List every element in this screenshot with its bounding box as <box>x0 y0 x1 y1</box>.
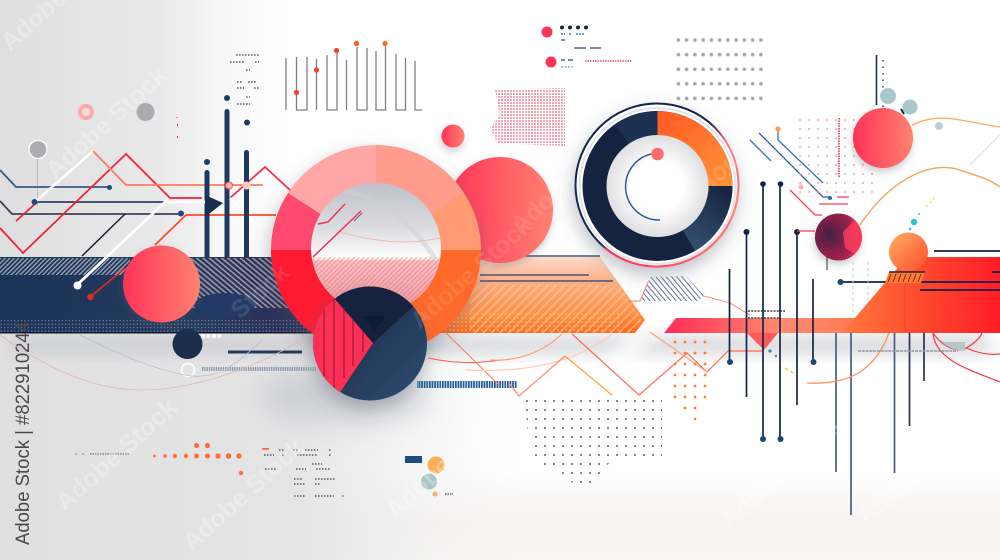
navy band <box>0 257 325 334</box>
orange curves right <box>807 118 1000 383</box>
zigzag lines lower <box>465 332 763 396</box>
line endpoints <box>32 185 184 216</box>
coral circle right <box>853 108 913 168</box>
lower right legend circles <box>405 456 453 496</box>
ring centre <box>311 183 441 303</box>
right diagonal accents <box>750 126 849 231</box>
maroon sphere <box>815 213 862 261</box>
small marker circles <box>29 103 178 206</box>
dark pie circle <box>300 282 440 400</box>
watermark text: Adobe Stock <box>715 411 848 534</box>
under band details <box>0 329 517 390</box>
navy columns <box>204 95 250 260</box>
left white and red connectors <box>74 202 205 300</box>
donut orange segment <box>658 111 732 186</box>
gray dot grid <box>675 33 766 103</box>
top left micro marks <box>230 55 260 104</box>
watermark text: Adobe Stock <box>40 61 173 184</box>
top right accents <box>876 55 943 130</box>
hatched comb <box>885 272 925 283</box>
right horizontal navy lines <box>827 251 1000 312</box>
vertical stock label: Adobe Stock | #822910244 <box>13 322 34 545</box>
mesh triangle <box>628 276 785 318</box>
bottom dot grid <box>525 399 662 486</box>
line chart left <box>0 151 290 256</box>
top legend <box>542 26 632 68</box>
donut upper segment <box>615 111 658 186</box>
watermark text: Adobe Stock <box>405 211 538 334</box>
lower left dotted scale <box>75 443 269 475</box>
watermark text: Adobe Stock <box>851 414 989 530</box>
watermark text: Stock <box>685 138 755 204</box>
orange dot grid <box>672 337 708 420</box>
orange sphere <box>889 232 928 272</box>
halftone square <box>490 88 565 146</box>
teal specks <box>768 196 936 374</box>
small coral circle <box>442 124 464 148</box>
chart markers <box>294 41 388 95</box>
watermark text: Adobe Stock <box>177 433 310 556</box>
watermark text: Adobe Stock <box>380 401 513 524</box>
segmented ring <box>271 145 481 355</box>
lower micro text marks <box>264 450 344 496</box>
watermark text: Stock <box>225 258 295 324</box>
vertical pins <box>727 181 924 515</box>
coral circle left <box>123 246 200 322</box>
donut needle arc <box>626 154 660 220</box>
large coral circle <box>447 157 553 263</box>
donut chart <box>575 103 739 267</box>
top comb chart <box>286 41 422 110</box>
donut centre <box>606 135 708 237</box>
watermark text: Adobe Stock <box>50 393 183 516</box>
watermark text: Adobe <box>505 167 582 239</box>
red strip and right trapezoid <box>664 257 1000 350</box>
orange band <box>420 256 645 333</box>
pink dot field <box>796 116 878 198</box>
donut lighter segment <box>658 186 732 251</box>
